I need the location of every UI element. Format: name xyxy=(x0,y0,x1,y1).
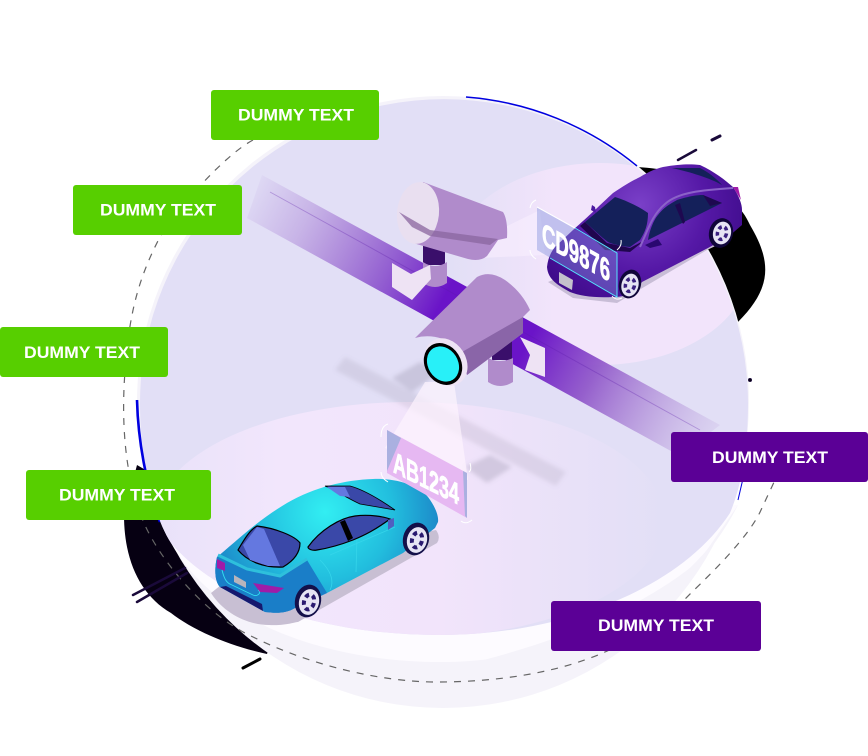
label: third green xyxy=(0,327,168,377)
black backdrop shape: lower left xyxy=(124,465,300,654)
pale base disc xyxy=(137,96,749,708)
plate: CD9876: CD9876 xyxy=(542,217,610,290)
lower camera xyxy=(415,274,545,394)
label: right purple: DUMMY TEXT xyxy=(712,448,829,467)
label: fourth green: DUMMY TEXT xyxy=(59,486,176,504)
light pool: bottom xyxy=(160,402,550,635)
camera mount beam xyxy=(247,175,720,456)
black backdrop shape: right xyxy=(637,167,765,322)
dashed orbit xyxy=(124,140,775,682)
purple car xyxy=(547,164,742,303)
label: third green: DUMMY TEXT xyxy=(24,343,141,362)
label: top green xyxy=(211,90,379,140)
tick marks xyxy=(133,136,752,668)
blue rim arcs xyxy=(137,97,745,522)
label: right purple xyxy=(671,432,868,482)
label: second green xyxy=(73,185,242,235)
plate: AB1234 xyxy=(381,424,472,523)
label: second green: DUMMY TEXT xyxy=(100,200,217,220)
label: bottom purple xyxy=(551,601,761,651)
label: bottom purple: DUMMY TEXT xyxy=(598,616,715,635)
plate: AB1234: AB1234 xyxy=(393,445,459,512)
upper camera xyxy=(392,180,507,300)
beam shadow on ground xyxy=(335,357,566,486)
mid pale layer xyxy=(171,500,738,662)
plate: CD9876 xyxy=(530,200,622,299)
label: top green: DUMMY TEXT xyxy=(238,106,355,124)
lavender disc xyxy=(140,99,748,635)
light beam to lower plate xyxy=(385,382,468,480)
light beam to upper plate xyxy=(480,210,545,258)
label: fourth green xyxy=(26,470,211,520)
light pool: top right xyxy=(502,163,733,364)
right mid tone xyxy=(480,505,738,661)
blue car xyxy=(211,479,439,625)
